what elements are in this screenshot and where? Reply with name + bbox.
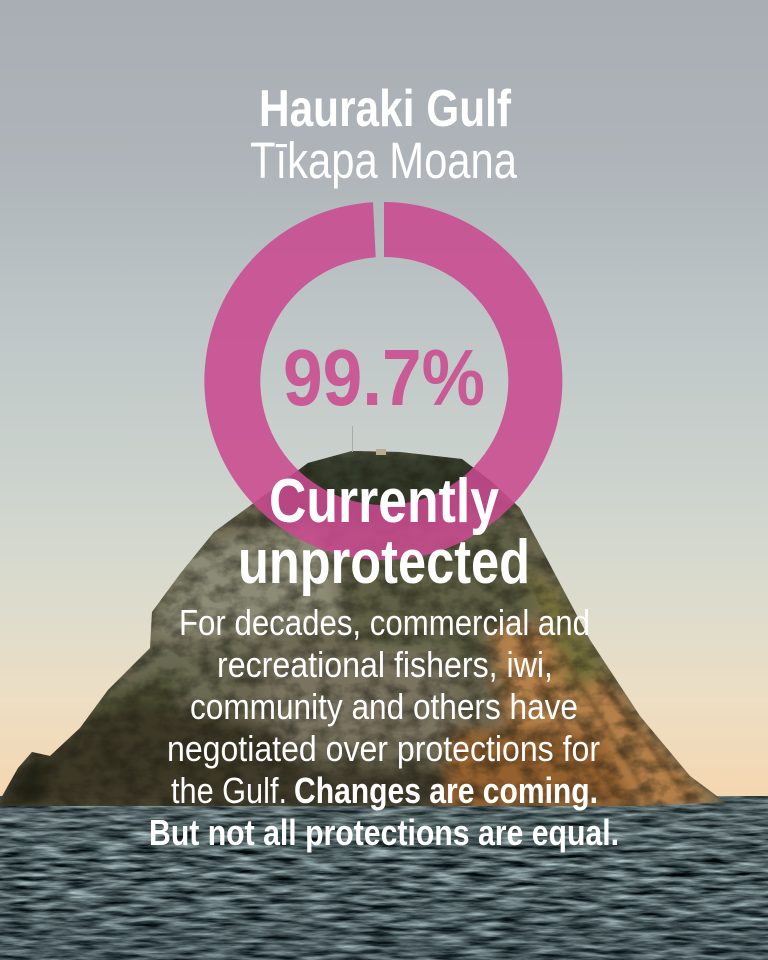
heading: English name: Hauraki Gulf [259, 80, 512, 138]
background: sea [0, 796, 768, 960]
body text: community and others have [190, 686, 578, 727]
body text: For decades, commercial and [179, 602, 590, 643]
body text: But not all protections are equal. [149, 812, 619, 853]
icon: lighthouse on summit [352, 426, 386, 455]
heading: Māori name: Tīkapa Moana [250, 132, 518, 189]
body text [149, 602, 619, 853]
body text: Changes are coming. [294, 770, 598, 811]
body text: the Gulf. [171, 770, 287, 811]
subheading [238, 467, 530, 597]
subheading: Currently [269, 467, 499, 536]
body text: recreational fishers, iwi, [217, 644, 553, 685]
title block [250, 80, 518, 189]
background: rocky island [0, 440, 768, 812]
donut value: 99.7% [283, 333, 485, 422]
subheading: unprotected [238, 528, 530, 597]
donut chart: 99.7% unprotected [204, 202, 562, 560]
body text: negotiated over protections for [167, 728, 600, 769]
